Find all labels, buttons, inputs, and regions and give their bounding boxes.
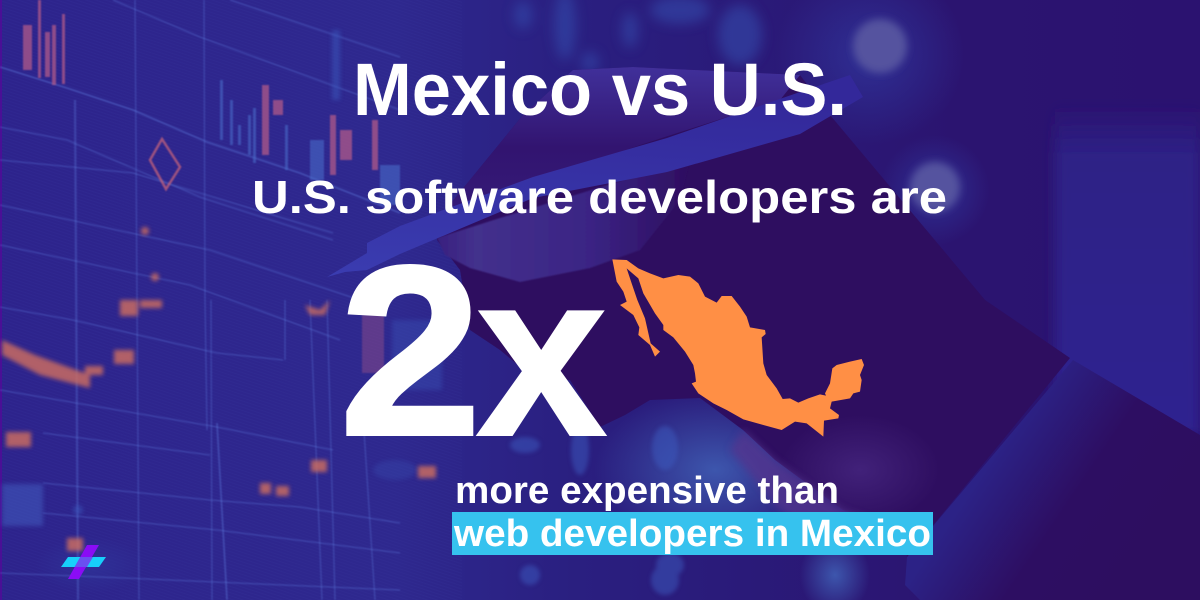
sleeve (905, 360, 1200, 600)
hand (437, 67, 1070, 557)
subtitle: U.S. software developers are (252, 171, 947, 223)
big figure: 2x: x (476, 223, 607, 485)
icon: map of Mexico (612, 259, 864, 437)
big figure: 2x: 2 (339, 216, 482, 486)
upper finger (443, 67, 800, 213)
big figure: 2x (339, 216, 607, 486)
highlighted text: web developers in Mexico: web developers in Mexico (453, 513, 931, 555)
chart marker (150, 139, 180, 189)
title: Mexico vs U.S. (353, 48, 847, 131)
icon: logo (61, 545, 106, 579)
pen (327, 75, 863, 277)
text: more expensive than: more expensive than (455, 470, 839, 512)
hand lower highlight (780, 415, 940, 525)
lower finger (437, 160, 690, 282)
